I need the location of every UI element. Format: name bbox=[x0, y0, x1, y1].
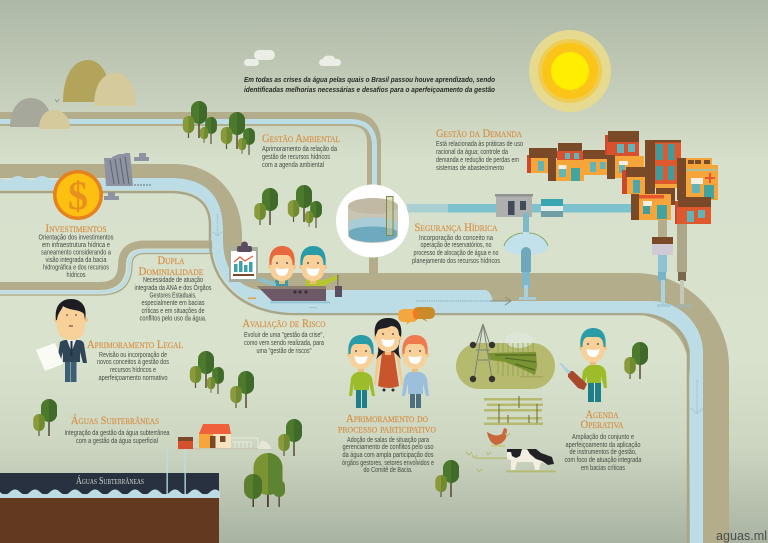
heading: aprimoramento do processo participativo: Aprimoramento do bbox=[346, 413, 428, 425]
suit man bbox=[36, 299, 88, 382]
heading: dupla dominialidade: especialmente em bacias bbox=[142, 300, 205, 307]
heading: aguas subterraneas: com a gestão da água superficial bbox=[76, 438, 158, 445]
heading: investimentos: saneamento considerando a bbox=[41, 250, 111, 256]
heading: gestao ambiental: gestão de recursos hídricos bbox=[262, 154, 330, 161]
intro text bbox=[244, 75, 495, 94]
city buildings bbox=[527, 131, 718, 224]
groundwater layers bbox=[0, 449, 220, 543]
boat bbox=[248, 286, 330, 308]
heading: aguas subterraneas bbox=[64, 413, 170, 445]
heading: aprimoramento do processo participativo: Adoção de salas de situação para bbox=[347, 437, 429, 444]
flow arrows bbox=[213, 214, 703, 414]
house i bbox=[675, 197, 711, 224]
groundwater layers: Águas Subterrâneas bbox=[76, 475, 144, 487]
river bbox=[0, 176, 703, 543]
treatment building bbox=[495, 194, 563, 217]
heading: dupla dominialidade: críticas e em situações de bbox=[142, 308, 205, 315]
heading: investimentos: visão integrada da bacia bbox=[46, 257, 107, 264]
heading: gestao da demanda: Gestão da Demanda bbox=[436, 128, 522, 140]
house e bbox=[622, 167, 645, 194]
grass bbox=[466, 433, 510, 472]
heading: aguas subterraneas: Águas Subterrâneas bbox=[71, 413, 159, 427]
right pipes bbox=[652, 219, 692, 308]
big tree group bbox=[244, 453, 285, 507]
heading: seguranca hidrica: operação de reservatórios, no bbox=[420, 242, 492, 249]
clinic g bbox=[677, 158, 718, 200]
trees upper bbox=[183, 101, 322, 228]
woman bbox=[374, 318, 403, 392]
heading: gestao da demanda: demanda e redução de perdas em bbox=[436, 157, 519, 164]
heading: dupla dominialidade: Dupla bbox=[158, 255, 185, 267]
person left bbox=[347, 335, 375, 408]
intro text: identificadas melhorias necessárias e desafios para o aperfeiçoamento da gestão bbox=[244, 85, 495, 94]
top stream bbox=[0, 119, 374, 200]
icon: dollar coin: $ bbox=[68, 173, 88, 218]
trees lower bbox=[33, 342, 648, 497]
speech bubbles bbox=[398, 307, 435, 325]
heading: aprimoramento do processo participativo: processo participativo bbox=[338, 424, 436, 436]
heading: investimentos: hidrográfica e dos recursos bbox=[43, 264, 109, 272]
irrigated field bbox=[456, 324, 555, 389]
heading: agenda operativa: com foco de atuação integrada bbox=[564, 457, 642, 464]
person with tool bbox=[559, 328, 607, 402]
river inner bank bbox=[0, 192, 688, 543]
heading: dupla dominialidade: integrada da ANA e dos Órgãos bbox=[134, 283, 212, 292]
heading: dupla dominialidade: Gestores Estaduais, bbox=[150, 293, 197, 300]
dupla dominialidade channel bbox=[0, 244, 213, 295]
heading: avaliacao de risco: Avaliação de Risco bbox=[242, 318, 326, 330]
heading: gestao ambiental bbox=[262, 133, 340, 169]
icon: dollar coin bbox=[53, 170, 103, 220]
main river banks bbox=[0, 164, 729, 543]
people in boat bbox=[258, 246, 342, 297]
watermark: aguas.ml bbox=[716, 529, 767, 543]
heading: agenda operativa: em bacias críticas bbox=[581, 465, 625, 472]
heading: aprimoramento legal bbox=[87, 339, 183, 382]
heading: gestao da demanda: Está relacionada às práticas de uso bbox=[436, 141, 523, 148]
house b bbox=[548, 143, 584, 181]
heading: investimentos: Investimentos bbox=[46, 223, 106, 235]
heading: agenda operativa: Operativa bbox=[580, 419, 624, 431]
house h bbox=[631, 194, 671, 220]
tall building f bbox=[645, 140, 681, 205]
heading: aguas subterraneas: Integração da gestão da água subterrânea bbox=[64, 430, 170, 437]
heading: gestao da demanda: sistemas de abastecimento bbox=[436, 165, 504, 172]
person right bbox=[401, 335, 429, 408]
heading: seguranca hidrica: planejamento dos recursos hídricos bbox=[412, 258, 500, 265]
heading: gestao ambiental: Gestão Ambiental bbox=[262, 133, 340, 145]
mountains bbox=[10, 60, 136, 129]
heading: agenda operativa: Ampliação do conjunto e bbox=[572, 434, 634, 441]
heading: agenda operativa bbox=[564, 409, 642, 472]
vertical link under tank bbox=[369, 250, 378, 276]
sun bbox=[529, 30, 611, 112]
heading: agenda operativa: aperfeiçoamento da aplicação bbox=[566, 442, 641, 449]
clouds bbox=[244, 50, 341, 66]
heading: agenda operativa: de instrumentos de gestão, bbox=[570, 449, 637, 456]
heading: gestao ambiental: Aprimoramento da relação da bbox=[262, 146, 337, 153]
heading: seguranca hidrica: Incorporação do conceito na bbox=[419, 235, 493, 242]
heading: aprimoramento legal: Revisão ou incorporação de bbox=[99, 352, 167, 359]
heading: dupla dominialidade: Dominialidade bbox=[138, 266, 204, 278]
heading: aprimoramento do processo participativo: da água com ampla participação dos bbox=[342, 452, 434, 459]
group of three people bbox=[347, 318, 429, 408]
heading: avaliacao de risco: como vem sendo realizada, para bbox=[244, 340, 324, 347]
heading: seguranca hidrica bbox=[412, 222, 500, 265]
heading: gestao da demanda bbox=[436, 128, 523, 172]
heading: aprimoramento legal: recursos hídricos e bbox=[110, 367, 156, 374]
heading: gestao ambiental: com a agenda ambiental bbox=[262, 162, 324, 169]
house c bbox=[583, 150, 607, 175]
heading: aprimoramento legal: Aprimoramento Legal bbox=[87, 339, 183, 351]
heading: dupla dominialidade: Necessidade de atuação bbox=[143, 277, 203, 284]
heading: seguranca hidrica: Segurança Hídrica bbox=[414, 222, 498, 234]
clipboard chart bbox=[229, 242, 258, 282]
heading: agenda operativa: Agenda bbox=[586, 409, 619, 421]
intro text: Em todas as crises da água pelas quais o Brasil passou houve aprendizado, sendo bbox=[244, 75, 495, 84]
farmhouse bbox=[178, 424, 272, 450]
heading: dupla dominialidade: conflitos pelo uso da água. bbox=[140, 316, 207, 323]
heading: aprimoramento do processo participativo: do Comitê de Bacia. bbox=[364, 467, 413, 474]
heading: aprimoramento legal: novos conceitos à gestão dos bbox=[97, 359, 169, 366]
heading: seguranca hidrica: processo de alocação de água e no bbox=[414, 250, 499, 257]
chicken bbox=[487, 428, 507, 446]
heading: investimentos: hídricos bbox=[66, 272, 86, 279]
heading: aprimoramento do processo participativo: gerenciamento de conflitos pelo uso bbox=[342, 444, 434, 451]
building d bbox=[605, 131, 644, 179]
heading: investimentos: em infraestrutura hídrica e bbox=[42, 242, 110, 249]
heading: investimentos bbox=[38, 223, 114, 279]
pipe to city bbox=[407, 204, 632, 212]
central pipe and basin bbox=[504, 213, 548, 300]
heading: avaliacao de risco bbox=[242, 318, 326, 355]
heading: aprimoramento do processo participativo: órgãos gestores, setores envolvidos e bbox=[342, 460, 434, 467]
dam bbox=[104, 153, 152, 200]
heading: aprimoramento do processo participativo bbox=[338, 413, 436, 474]
heading: avaliacao de risco: Evoluir de uma "gestão da crise", bbox=[244, 332, 324, 339]
crop rows bbox=[484, 396, 543, 425]
heading: investimentos: Orientação dos investimentos bbox=[38, 234, 114, 242]
cow bbox=[506, 449, 556, 472]
heading: dupla dominialidade bbox=[134, 255, 212, 323]
reservoir circle bbox=[336, 184, 409, 258]
heading: gestao da demanda: racional da água; controle da bbox=[436, 149, 508, 156]
heading: aprimoramento legal: aperfeiçoamento normativo bbox=[98, 375, 168, 382]
heading: avaliacao de risco: uma "gestão de riscos" bbox=[256, 348, 312, 355]
house a bbox=[527, 148, 557, 173]
